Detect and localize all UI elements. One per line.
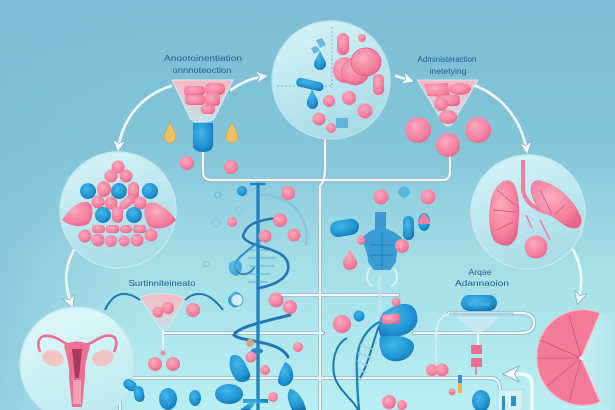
icon: yellow drop left bbox=[164, 122, 176, 143]
label: middle left: Surtinniteineato bbox=[128, 278, 196, 288]
pink pie chart bbox=[537, 310, 615, 410]
label: top right: Administeraction bbox=[418, 54, 477, 64]
funnel: middle left with wings bbox=[105, 294, 223, 356]
background left shading bbox=[0, 0, 140, 410]
funnel: left with tablets bbox=[172, 80, 233, 122]
blue pill with label bbox=[461, 295, 497, 311]
arrow: lungs to pie bbox=[573, 250, 581, 302]
label: middle right: Arqae bbox=[468, 267, 492, 277]
funnel: right with tablets bbox=[417, 80, 478, 126]
label: middle right: Adannaoion bbox=[455, 278, 509, 288]
scattered blue bubbles bbox=[106, 186, 410, 322]
arrow: right funnel to lungs bbox=[476, 86, 527, 152]
pink drop bbox=[343, 249, 357, 270]
blue capsule bbox=[329, 218, 360, 238]
arrow: lower right return bbox=[506, 374, 532, 410]
dispenser with pink valves bbox=[436, 314, 514, 375]
panel: lungs circle bbox=[471, 155, 585, 269]
blue pill with label: eticlae bbox=[468, 302, 491, 308]
arrow: funnel to top circle bbox=[231, 76, 266, 90]
label: top left: Anootoinentiation bbox=[164, 53, 242, 63]
panel: left circle of cells bbox=[60, 152, 176, 268]
pink spheres near right funnel bbox=[405, 117, 491, 157]
label: top right: inetetying bbox=[430, 66, 467, 76]
label: top left bbox=[164, 53, 242, 75]
icon: yellow drop right bbox=[226, 122, 238, 143]
arrow: left circle to uterus bbox=[66, 250, 74, 306]
other blue shapes bottom bbox=[121, 260, 490, 410]
curved arrows bbox=[66, 76, 581, 410]
arrow: funnel to left circle bbox=[118, 86, 171, 150]
DNA helix centre bbox=[234, 184, 307, 410]
blue organ and DNA bbox=[333, 304, 417, 410]
icon: blue capsule valve bbox=[193, 123, 213, 152]
panel: uterus circle bbox=[20, 307, 134, 410]
body torso icon bbox=[357, 212, 430, 322]
label: top left: onnnoteoction bbox=[172, 65, 232, 75]
label: top right bbox=[418, 54, 477, 76]
panel: top circle molecules bbox=[272, 21, 390, 139]
pipe network bbox=[120, 139, 534, 410]
label: middle right bbox=[455, 267, 509, 288]
arrow: top circle to right funnel bbox=[396, 76, 412, 81]
glass container lower right bbox=[458, 375, 523, 410]
scattered pink spheres bbox=[148, 156, 456, 410]
